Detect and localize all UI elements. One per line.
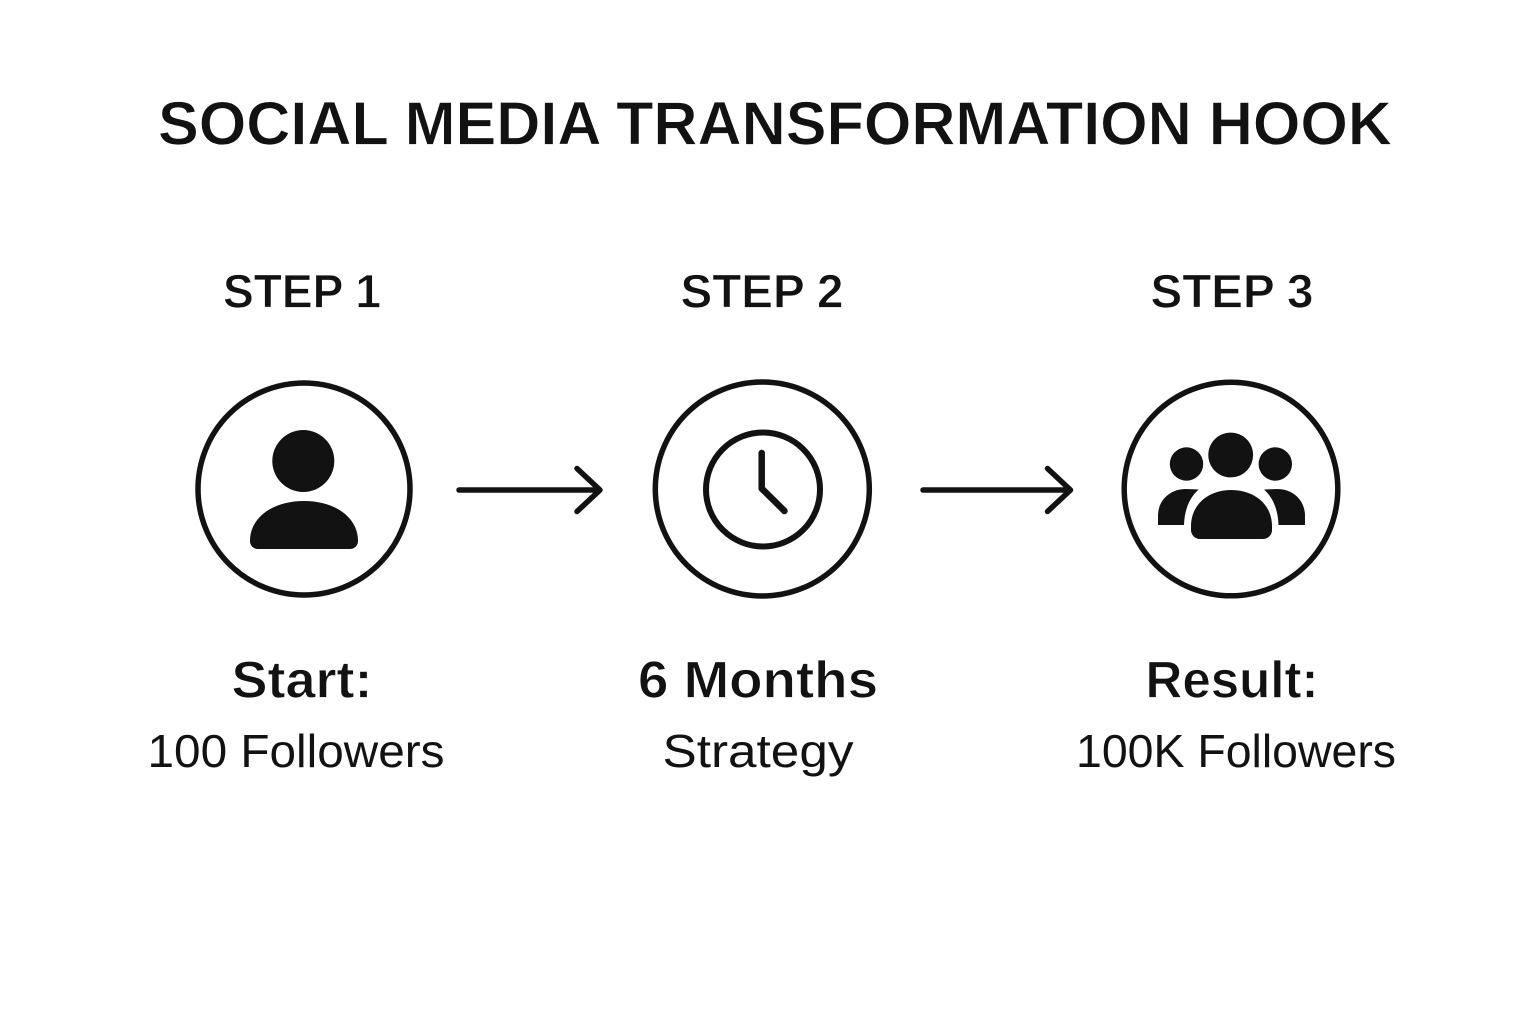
step 2 column xyxy=(638,264,878,777)
arrow: step 1 to step 2 xyxy=(459,468,600,512)
step 2 heading: STEP 2 xyxy=(680,264,844,318)
step 3 label: Result: xyxy=(1146,652,1318,710)
step 1 heading: STEP 1 xyxy=(223,264,381,318)
step 1 column xyxy=(148,264,444,777)
icon: clock in circle xyxy=(655,382,869,596)
step 1 label: Start: xyxy=(232,652,372,710)
step 2 description: Strategy xyxy=(662,725,854,777)
step 3 description: 100K Followers xyxy=(1076,725,1396,777)
step 3 column xyxy=(1076,264,1396,777)
icon: group in circle xyxy=(1124,382,1338,596)
step 2 label: 6 Months xyxy=(638,652,878,710)
step 3 heading: STEP 3 xyxy=(1150,264,1314,318)
step 1 description: 100 Followers xyxy=(148,725,444,777)
icon: person in circle xyxy=(198,383,410,595)
title: SOCIAL MEDIA TRANSFORMATION HOOK xyxy=(158,90,1392,158)
arrow: step 2 to step 3 xyxy=(923,468,1070,512)
